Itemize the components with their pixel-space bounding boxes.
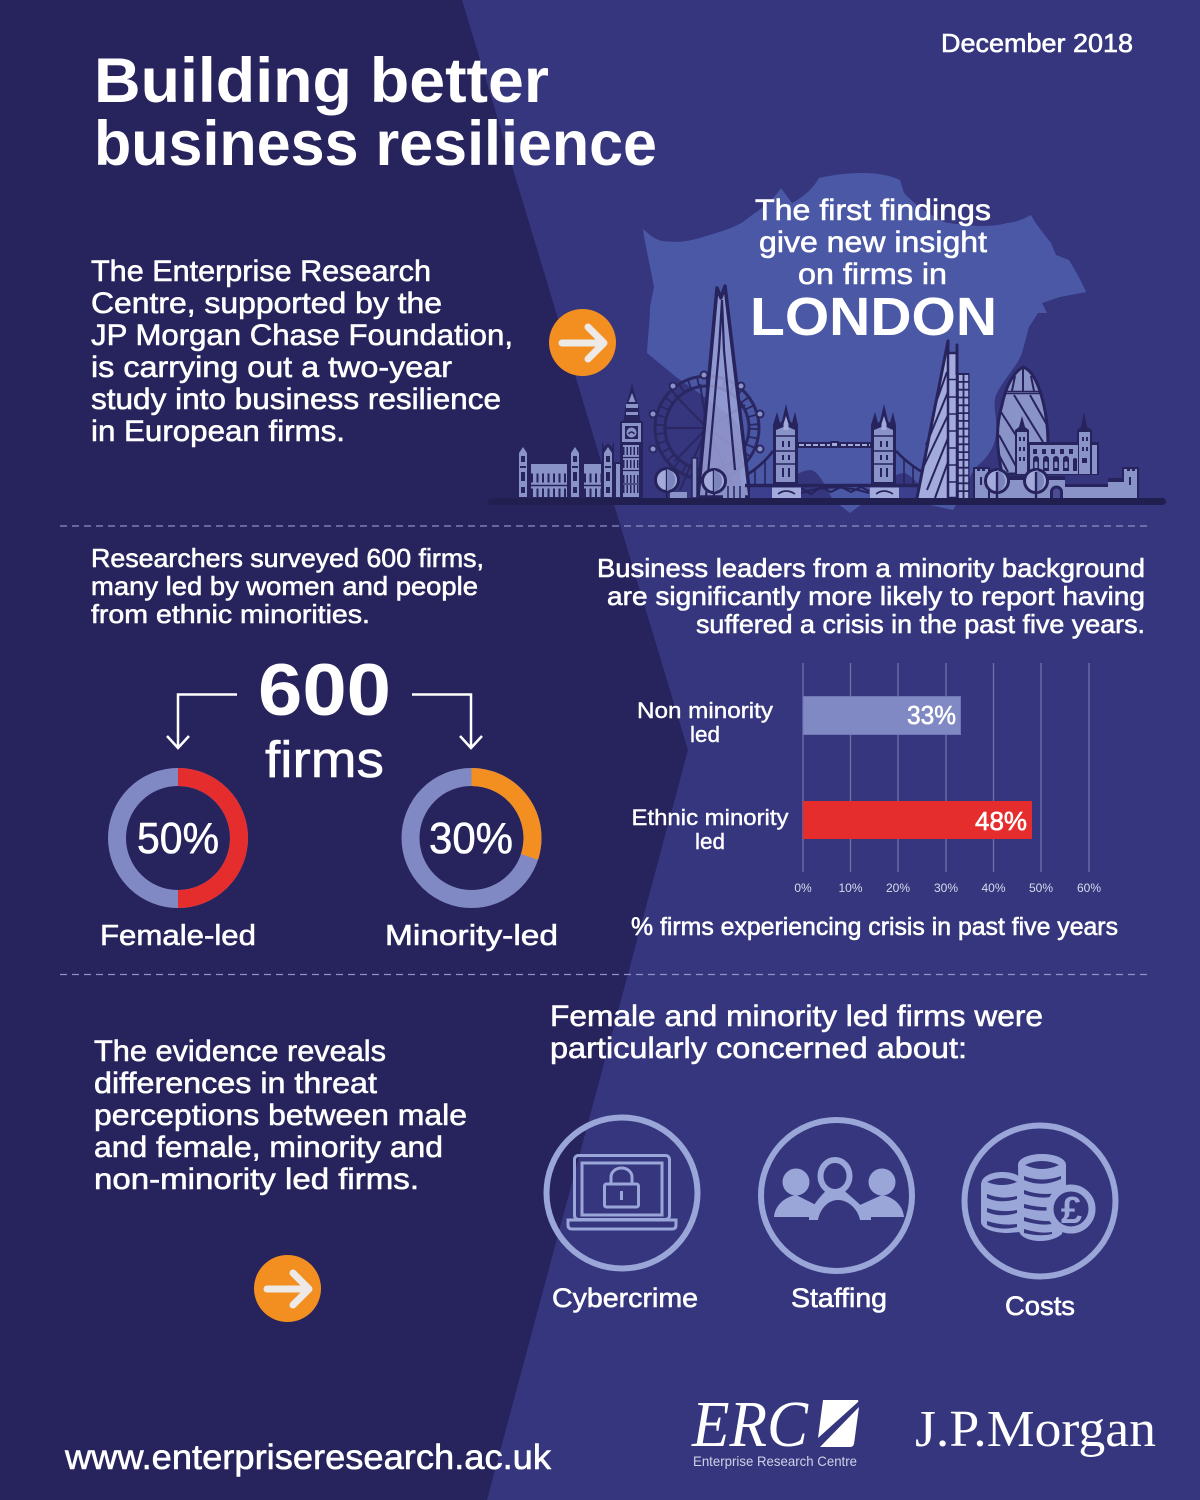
map of London (643, 173, 1086, 513)
label: staffing: Staffing (791, 1283, 887, 1313)
axis labels: 10% (838, 881, 863, 895)
axis labels: 0% (794, 881, 812, 895)
evidence text (94, 1035, 467, 1196)
website url: www.enterpriseresearch.ac.uk (64, 1438, 552, 1477)
evidence text: differences in threat (94, 1067, 378, 1100)
concerns heading: Female and minority led firms were (550, 1000, 1043, 1033)
business leaders text: are significantly more likely to report having (607, 581, 1145, 611)
business leaders text (597, 553, 1145, 639)
Tower Bridge (745, 404, 948, 498)
London findings text: give new insight (759, 226, 988, 259)
trees (986, 470, 1048, 498)
icon: costs: £ (1061, 1190, 1082, 1232)
icon: orange arrow 2 (254, 1255, 321, 1322)
donut: minority-led 30%: 30% (429, 814, 513, 863)
survey text: Researchers surveyed 600 firms, (91, 543, 484, 573)
category labels (632, 698, 788, 854)
bar: non minority (803, 696, 960, 734)
The Gherkin (998, 367, 1048, 474)
category labels: Non minority (637, 698, 773, 723)
arrow right (412, 694, 482, 748)
Scalpel and Cheesegrater towers (917, 341, 970, 498)
intro text block: Centre, supported by the (91, 287, 442, 320)
chart caption: % firms experiencing crisis in past five years (631, 913, 1118, 941)
icon: costs (964, 1126, 1116, 1276)
background light angled panel (462, 0, 1200, 1500)
bar chart (632, 663, 1101, 895)
axis labels: 30% (934, 881, 958, 895)
evidence text: perceptions between male (94, 1099, 467, 1132)
London findings text: on firms in (798, 258, 947, 291)
title (94, 46, 657, 179)
divider top (60, 525, 1150, 527)
London findings text (750, 194, 997, 347)
label: cybercrime: Cybercrime (552, 1283, 698, 1313)
600 firms heading (258, 650, 391, 788)
evidence text: The evidence reveals (94, 1035, 386, 1068)
intro text block: The Enterprise Research (91, 255, 431, 288)
axis labels: 50% (1029, 881, 1053, 895)
London Eye (650, 372, 764, 490)
logo: J.P.Morgan: J.P.Morgan (915, 1401, 1156, 1458)
survey text: from ethnic minorities. (91, 599, 370, 629)
evidence text: and female, minority and (94, 1131, 443, 1164)
label: female-led: Female-led (100, 920, 256, 952)
evidence text: non-minority led firms. (94, 1163, 419, 1196)
arrow left (167, 694, 237, 748)
intro text block: in European firms. (91, 415, 345, 448)
600 firms heading: 600 (258, 650, 391, 731)
survey text: many led by women and people (91, 571, 478, 601)
logo: ERC: Enterprise Research Centre (693, 1453, 857, 1469)
label: minority-led: Minority-led (385, 920, 558, 952)
icon: cybercrime (546, 1118, 698, 1268)
business leaders text: suffered a crisis in the past five years. (696, 609, 1145, 639)
intro text block: study into business resilience (91, 383, 501, 416)
600 firms heading: firms (265, 731, 384, 788)
bar: ethnic minority (803, 801, 1032, 839)
icon: staffing (761, 1120, 912, 1271)
bascule span (801, 487, 869, 494)
London skyline illustration (488, 286, 1166, 505)
axis labels: 60% (1077, 881, 1101, 895)
left tower (772, 404, 801, 498)
concerns heading (550, 1000, 1043, 1065)
side spans and cables (745, 451, 948, 498)
axis labels: 20% (886, 881, 910, 895)
ground bar (488, 498, 1166, 505)
walkway (798, 441, 871, 448)
bar: non minority: 33% (907, 700, 956, 730)
intro text block: is carrying out a two-year (91, 351, 452, 384)
right tower (870, 404, 899, 498)
business leaders text: Business leaders from a minority background (597, 553, 1145, 583)
curtain wall (973, 467, 1139, 498)
icon: orange arrow (549, 309, 616, 376)
category labels: led (690, 722, 720, 747)
concerns heading: particularly concerned about: (550, 1032, 967, 1065)
logo: ERC (691, 1388, 859, 1469)
divider bottom (60, 974, 1150, 976)
London findings text: LONDON (750, 287, 997, 347)
axis labels: 40% (981, 881, 1006, 895)
intro text block: JP Morgan Chase Foundation, (91, 319, 513, 352)
Tower of London (973, 412, 1139, 498)
donut: female-led 50%: 50% (137, 814, 219, 863)
label: costs: Costs (1005, 1291, 1075, 1321)
date: December 2018 (941, 28, 1133, 58)
donut: minority-led 30% (410, 777, 533, 899)
title: business resilience (94, 109, 657, 179)
category labels: led (695, 829, 725, 854)
category labels: Ethnic minority (632, 805, 788, 830)
axis labels (794, 881, 1101, 895)
intro text block (91, 255, 513, 448)
title: Building better (94, 46, 549, 116)
Houses of Parliament (517, 441, 622, 498)
survey text (91, 543, 484, 629)
London findings text: The first findings (755, 194, 991, 227)
White Tower (1015, 412, 1099, 475)
donut: female-led 50% (117, 777, 239, 899)
bar: ethnic minority: 48% (975, 806, 1027, 836)
logo: ERC: ERC (691, 1388, 809, 1461)
trees by the Shard (656, 468, 726, 498)
The Shard (670, 286, 750, 498)
Big Ben (620, 383, 643, 498)
